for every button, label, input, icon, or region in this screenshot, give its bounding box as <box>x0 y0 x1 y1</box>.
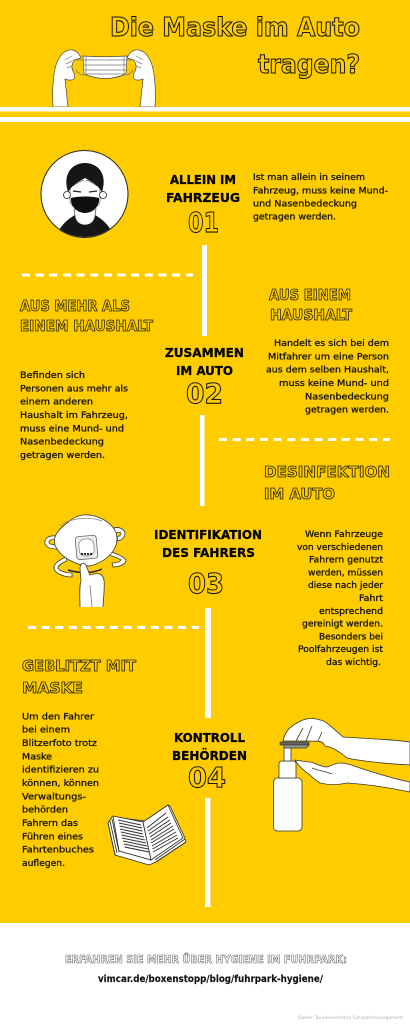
text block: identifizieren zu <box>22 765 99 776</box>
text block: gereinigt werden. <box>302 619 383 630</box>
double white divider <box>0 107 410 122</box>
heading <box>165 346 244 379</box>
text block: Blitzerfoto trotz <box>22 738 97 749</box>
right text block <box>266 338 389 416</box>
right text block: muss keine Mund- und <box>279 378 389 389</box>
text block: Fahrern genutzt <box>309 555 383 566</box>
right heading: AUS EINEM <box>269 286 351 304</box>
text block: von verschiedenen <box>297 542 383 553</box>
text block: Poolfahrzeugen ist <box>298 644 383 655</box>
timeline bars <box>200 245 211 907</box>
left heading <box>20 297 154 335</box>
right text block: Handelt es sich bei dem <box>274 338 389 349</box>
left heading: AUS MEHR ALS <box>20 297 130 315</box>
panel: step 01 alone in the vehicle <box>41 150 388 240</box>
footer link: vimcar.de/boxenstopp/blog/fuhrpark-hygiene/ <box>98 974 323 985</box>
left heading: EINEM HAUSHALT <box>20 317 154 335</box>
heading: DES FAHRERS <box>162 546 255 561</box>
text block: diese nach jeder <box>308 580 383 591</box>
number 03: 03 <box>188 567 224 600</box>
icon: hands holding a face mask <box>53 50 155 107</box>
left text block: Personen aus mehr als <box>20 383 128 394</box>
left text block: Haushalt im Fahrzeug, <box>20 410 128 421</box>
heading: ZUSAMMEN <box>165 346 244 361</box>
heading <box>172 731 247 764</box>
left text block: einem anderen <box>20 397 93 408</box>
left text block: Nasenbedeckung <box>20 437 104 448</box>
text block: bei einem <box>22 725 70 736</box>
text block: Besonders bei <box>319 631 383 642</box>
heading: FAHRZEUG <box>166 191 240 206</box>
heading: IDENTIFIKATION <box>154 528 262 543</box>
heading: BEHÖRDEN <box>172 748 247 764</box>
text block: das wichtig. <box>326 657 381 668</box>
number 02: 02 <box>186 377 223 410</box>
number 04: 04 <box>188 761 226 794</box>
heading: IM AUTO <box>176 364 233 379</box>
title <box>110 13 360 80</box>
text block: Fahrzeug, muss keine Mund- <box>253 185 388 196</box>
heading: speed camera <box>22 657 137 697</box>
text block: behörden <box>22 805 68 816</box>
icon: hands using a pump dispenser <box>274 718 410 831</box>
text block: Maske <box>22 751 52 762</box>
footer heading: ERFAHREN SIE MEHR ÜBER HYGIENE IM FUHRPARK: <box>65 952 347 966</box>
heading: disinfection: DESINFEKTION <box>264 463 390 481</box>
panel: step 02 together in the car <box>20 286 389 461</box>
text block: Fahrt <box>359 593 383 604</box>
heading: disinfection: IM AUTO <box>264 485 335 503</box>
text block: werden, müssen <box>308 567 383 578</box>
number 01: 01 <box>188 206 219 239</box>
text block: Fahrern das <box>22 818 78 829</box>
text block: Ist man allein in seinem <box>253 172 365 183</box>
heading <box>166 173 240 206</box>
dashed separators <box>22 275 390 628</box>
title: Die Maske im Auto <box>110 13 360 43</box>
heading: speed camera: GEBLITZT MIT <box>22 657 137 675</box>
heading: speed camera: MASKE <box>22 679 83 697</box>
text block: und Nasenbedeckung <box>253 199 357 210</box>
footer call to action <box>65 952 403 1021</box>
text block <box>253 172 388 223</box>
right heading <box>269 286 353 324</box>
title: tragen? <box>258 50 360 80</box>
icon: person wearing a mask <box>41 150 128 240</box>
right text block: Mitfahrer um eine Person <box>268 351 389 362</box>
source note: Quelle: Bundesverband Fuhrparkmanagement <box>298 1015 403 1021</box>
heading: disinfection <box>264 463 390 503</box>
text block: Führen eines <box>22 831 83 842</box>
text block: Fahrtenbuches <box>22 845 94 856</box>
text block: Wenn Fahrzeuge <box>305 529 383 540</box>
left text block: getragen werden. <box>20 450 105 461</box>
left text block <box>20 370 128 461</box>
panel: step 04 enforcement authorities <box>22 657 410 869</box>
heading: ALLEIN IM <box>170 173 236 188</box>
icon: respirator mask held by a hand <box>45 515 126 607</box>
text block: entsprechend <box>319 606 383 617</box>
text block <box>22 711 99 869</box>
panel: step 03 driver identification and disinfection <box>45 463 390 668</box>
right heading: HAUSHALT <box>270 306 353 324</box>
text block: Um den Fahrer <box>22 711 94 722</box>
left text block: muss eine Mund- und <box>20 423 124 434</box>
text block: können, können <box>22 778 99 789</box>
left text block: Befinden sich <box>20 370 85 381</box>
text block: getragen werden. <box>253 212 336 223</box>
icon: open logbook <box>108 805 186 865</box>
text block: Verwaltungs- <box>22 791 86 802</box>
right text block: Nasenbedeckung <box>305 391 389 402</box>
right text block: getragen werden. <box>305 405 389 416</box>
text block <box>297 529 383 668</box>
heading <box>154 528 262 561</box>
heading: KONTROLL <box>174 731 245 746</box>
text block: auflegen. <box>22 858 65 869</box>
right text block: aus dem selben Haushalt, <box>266 365 389 376</box>
